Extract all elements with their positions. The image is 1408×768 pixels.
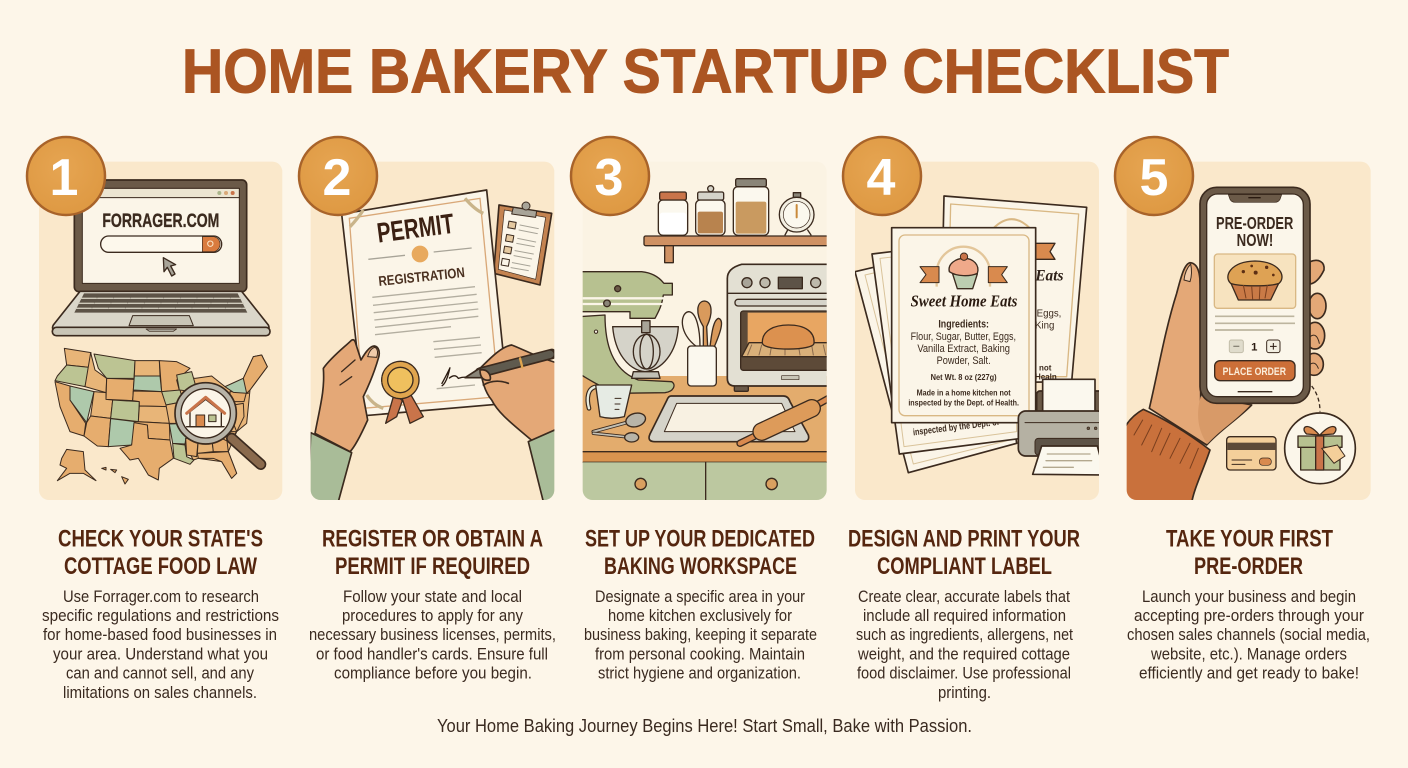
- step 4 text: food disclaimer. Use professional: [857, 664, 1071, 682]
- front label: Sweet Home Eats: Sweet Home Eats: [911, 292, 1018, 311]
- step 2 text: procedures to apply for any: [342, 606, 523, 625]
- step 4 text: weight, and the required cottage: [857, 644, 1070, 664]
- step 3 heading: SET UP YOUR DEDICATED: [585, 526, 815, 552]
- step 2 text: compliance before you begin.: [334, 664, 532, 682]
- icon: clipboard: [494, 202, 552, 285]
- icon: stand mixer: [578, 272, 678, 393]
- step 5 heading: TAKE YOUR FIRST: [1166, 526, 1333, 552]
- front label: Sweet Home Eats: Powder, Salt.: [937, 355, 991, 367]
- step 1 text: can and cannot sell, and any: [66, 664, 254, 682]
- footer tagline: Your Home Baking Journey Begins Here! Start Small, Bake with Passion.: [437, 716, 972, 736]
- stacked label sheets: inspected by the Dept. of: [912, 417, 1000, 437]
- panel background: [39, 162, 282, 500]
- step 1 text: Use Forrager.com to research: [63, 587, 259, 606]
- step 4 text: [856, 587, 1073, 702]
- permit document: REGISTRATION: [378, 264, 466, 289]
- badge: step 2: [299, 137, 377, 215]
- front label: Sweet Home Eats: inspected by the Dept. of Health.: [908, 397, 1019, 407]
- step 3 text: [584, 587, 817, 682]
- front label: Sweet Home Eats: Net Wt. 8 oz (227g): [931, 372, 997, 382]
- icon: right hand with pen: [465, 345, 558, 502]
- step 3 text: business baking, keeping it separate: [584, 625, 817, 644]
- step 3 text: strict hygiene and organization.: [598, 664, 801, 682]
- icon: left hand and sleeve: [308, 340, 379, 502]
- front label: Sweet Home Eats: Flour, Sugar, Butter, Eggs,: [911, 331, 1016, 343]
- panel background: [583, 162, 827, 500]
- step 4 text: printing.: [938, 683, 991, 702]
- stacked label sheets: not: [1039, 364, 1052, 373]
- step 1 text: limitations on sales channels.: [63, 683, 257, 702]
- icon: knit sleeve: [1123, 409, 1210, 503]
- panel 1: illustration of laptop and map: [39, 162, 282, 500]
- connector: dashed arrow: [1312, 386, 1320, 412]
- front label: Sweet Home Eats: Ingredients:: [938, 318, 989, 330]
- icon: utensil crock: [682, 301, 722, 386]
- wooden counter and cabinets: [578, 376, 832, 504]
- step 5 text: accepting pre-orders through your: [1134, 606, 1364, 625]
- icon: credit card: [1227, 437, 1276, 470]
- permit document: [342, 190, 508, 416]
- step 4 text: such as ingredients, allergens, net: [856, 625, 1073, 644]
- permit document: PERMIT: [375, 208, 456, 249]
- stacked label sheets: Eats: [1034, 268, 1063, 285]
- step 1 text: [42, 587, 279, 702]
- icon: measuring cup and spoons: [588, 385, 647, 442]
- step 2 text: [309, 587, 556, 682]
- front label: Sweet Home Eats: Made in a home kitchen not: [917, 387, 1011, 397]
- step 3 heading: BAKING WORKSPACE: [604, 553, 797, 580]
- step 4 text: include all required information: [863, 606, 1066, 625]
- step 2 heading: [322, 526, 543, 580]
- icon: smartphone: 1: [1251, 342, 1257, 354]
- panel 2: illustration of permit being signed: [308, 162, 558, 502]
- stacked label sheets: Healn: [1035, 372, 1057, 381]
- title: HOME BAKERY STARTUP CHECKLIST: [182, 38, 1229, 106]
- panel background: [855, 162, 1099, 500]
- step 5 text: website, etc.). Manage orders: [1150, 644, 1347, 664]
- step 1 heading: COTTAGE FOOD LAW: [64, 553, 257, 580]
- step 5 text: chosen sales channels (social media,: [1127, 625, 1370, 644]
- step 1 text: specific regulations and restrictions: [42, 606, 279, 625]
- icon: smartphone: PRE-ORDER: [1216, 213, 1294, 233]
- icon: smartphone: PLACE ORDER: [1223, 366, 1286, 378]
- icon: gift in circle: [1285, 413, 1355, 484]
- badge: step 1: 1: [50, 149, 78, 207]
- step 3 heading: [585, 526, 815, 580]
- wall shelf with jars and clock: [644, 179, 831, 263]
- icon: magnifying glass with house: [175, 383, 261, 464]
- icon: ribbon seal: [382, 361, 423, 423]
- step 3 text: from personal cooking. Maintain: [595, 644, 805, 664]
- step 5 text: [1127, 587, 1370, 682]
- stacked label sheets: [855, 196, 1087, 473]
- badge: step 4: 4: [867, 149, 896, 207]
- icon: rolling pin: [740, 397, 832, 443]
- step 5 text: efficiently and get ready to bake!: [1139, 664, 1359, 682]
- badge: step 5: 5: [1140, 149, 1168, 207]
- icon: printer: [1018, 379, 1105, 475]
- step 1 heading: CHECK YOUR STATE'S: [58, 526, 263, 552]
- step 2 heading: PERMIT IF REQUIRED: [335, 553, 530, 580]
- badge: step 3: [571, 137, 649, 215]
- step 5 heading: PRE-ORDER: [1194, 553, 1303, 580]
- badge: step 2: 2: [323, 149, 351, 207]
- icon: laptop: [52, 180, 270, 336]
- step 2 text: necessary business licenses, permits,: [309, 625, 556, 644]
- step 4 heading: DESIGN AND PRINT YOUR: [848, 526, 1080, 552]
- badge: step 4: [843, 137, 921, 215]
- step 1 heading: [58, 526, 263, 580]
- front label: Sweet Home Eats: [892, 228, 1036, 423]
- stacked label sheets: King: [1035, 320, 1054, 331]
- step 5 text: Launch your business and begin: [1142, 587, 1356, 606]
- panel background: [1127, 162, 1371, 500]
- front label: Sweet Home Eats: Vanilla Extract, Baking: [917, 343, 1010, 355]
- icon: hand holding phone: [1149, 260, 1326, 445]
- step 2 text: or food handler's cards. Ensure full: [316, 644, 548, 664]
- step 1 text: for home-based food businesses in: [43, 625, 277, 644]
- icon: oven with loaf: [727, 264, 834, 391]
- badge: step 1: [27, 137, 105, 215]
- panel 5: illustration of phone pre-order: [1123, 162, 1371, 503]
- step 2 heading: REGISTER OR OBTAIN A: [322, 526, 543, 552]
- map: United States: [55, 348, 267, 484]
- stacked label sheets: Eggs,: [1037, 309, 1061, 320]
- panel 3: illustration of kitchen workspace: [582, 178, 827, 500]
- step 4 text: Create clear, accurate labels that: [858, 587, 1070, 606]
- step 4 heading: [848, 526, 1080, 580]
- icon: baking tray with dough: [649, 396, 809, 442]
- icon: smartphone: NOW!: [1237, 230, 1273, 250]
- icon: smartphone: [1200, 187, 1310, 403]
- step 3 text: Designate a specific area in your: [595, 587, 805, 606]
- step 4 heading: COMPLIANT LABEL: [877, 553, 1052, 580]
- badge: step 3: 3: [595, 149, 623, 207]
- step 2 text: Follow your state and local: [343, 587, 522, 606]
- panel background: [311, 162, 554, 500]
- panel 4: illustration of labels and printer: [855, 162, 1105, 500]
- step 1 text: your area. Understand what you: [53, 644, 268, 664]
- step 5 heading: [1166, 526, 1333, 580]
- step 3 text: home kitchen exclusively for: [608, 606, 792, 625]
- badge: step 5: [1115, 137, 1193, 215]
- icon: laptop: FORRAGER.COM: [102, 211, 219, 232]
